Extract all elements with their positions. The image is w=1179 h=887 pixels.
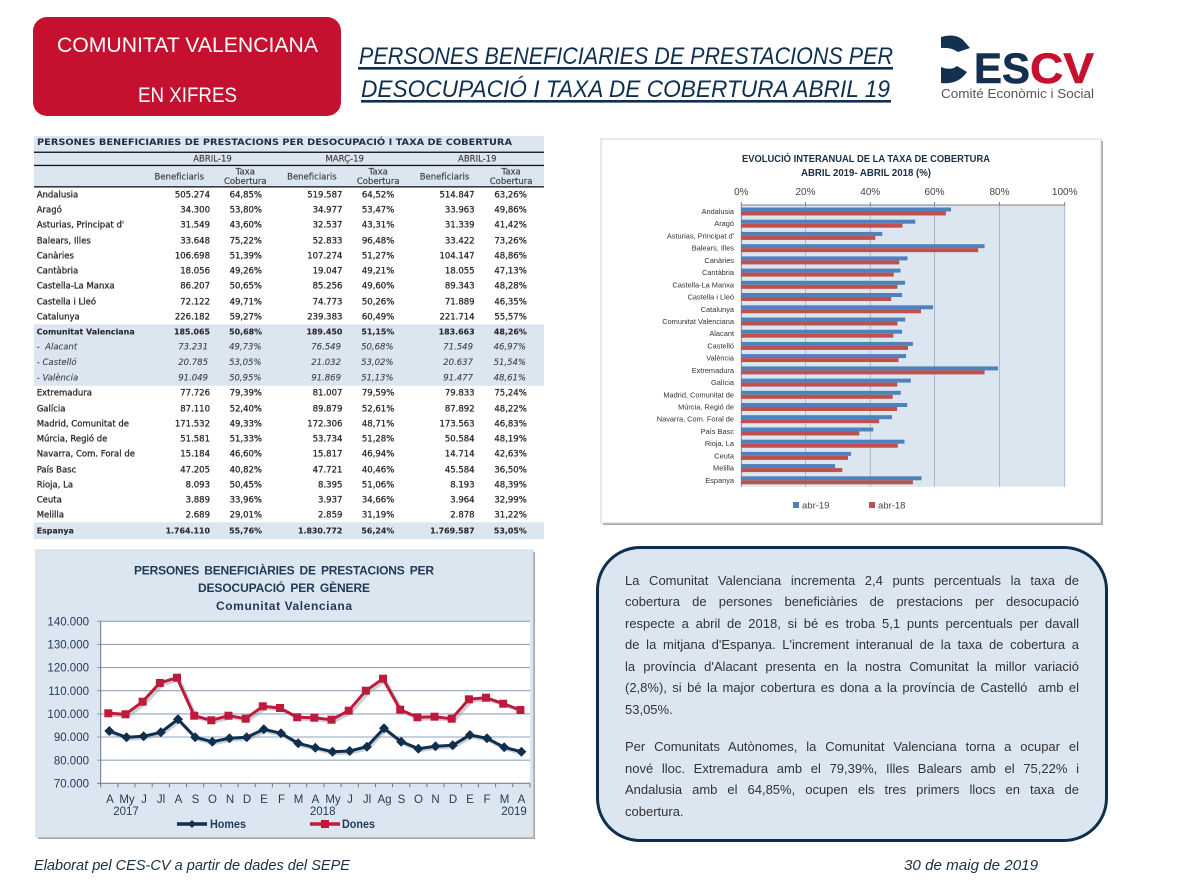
table rows: 31,19% <box>362 511 394 521</box>
table rows: 40,82% <box>230 465 262 475</box>
table rows: 91.477 <box>443 374 474 384</box>
table rows: 55,76% <box>229 526 262 536</box>
table column headers: Beneficiaris <box>155 173 205 183</box>
table rows: 46,83% <box>494 420 527 430</box>
table rows: 226.182 <box>175 312 210 322</box>
line chart month labels: N <box>431 794 440 806</box>
table rows: Castella-La Manxa <box>37 282 115 292</box>
table rows: 43,60% <box>230 221 262 231</box>
line chart y axis labels: 90.000 <box>54 732 89 744</box>
table rows: - Castelló <box>37 357 77 368</box>
table rows: Navarra, Com. Foral de <box>37 450 135 460</box>
table rows: 48,19% <box>494 435 527 445</box>
line chart legend: Homes <box>210 819 246 831</box>
table rows: 14.714 <box>445 450 475 460</box>
table column headers: Taxa <box>500 167 521 177</box>
table rows: 106.698 <box>175 252 210 262</box>
table rows: 86.207 <box>180 282 210 292</box>
panel: commentary text <box>596 546 1108 842</box>
table rows: 173.563 <box>439 420 475 430</box>
line chart month labels: A <box>312 794 320 806</box>
table rows: 21.032 <box>311 358 341 368</box>
logo CES-CV <box>941 36 1094 101</box>
table rows: 104.147 <box>439 252 475 262</box>
table rows: 32,99% <box>494 496 527 506</box>
table rows: 19.047 <box>313 266 342 276</box>
table rows: 64,52% <box>362 190 394 200</box>
table: beneficiaries and coverage rate <box>34 136 544 539</box>
table column headers: Beneficiaris <box>420 173 470 183</box>
table rows: 74.773 <box>313 297 342 307</box>
table rows: 51,15% <box>361 328 394 337</box>
bar chart category labels: Cantàbria <box>702 268 735 277</box>
table rows: 221.714 <box>439 312 475 322</box>
bar chart category labels: Madrid, Comunitat de <box>663 390 734 399</box>
table rows: 32.537 <box>313 221 342 231</box>
paragraph 2: Andalusia amb el 64,85%, ocupen els tres primers llocs en taxa de <box>625 782 1079 797</box>
table rows: 89.343 <box>445 282 475 292</box>
table rows: País Basc <box>37 465 77 475</box>
table rows: 45.584 <box>445 465 475 475</box>
bars abr-18 <box>741 212 985 484</box>
table rows: 48,26% <box>494 328 527 337</box>
bar chart category labels: Andalusia <box>702 207 735 216</box>
source note: Elaborat pel CES-CV a partir de dades del SEPE <box>34 858 350 874</box>
table rows: 47,13% <box>494 266 527 276</box>
bar chart category labels: Balears, Illes <box>692 244 734 253</box>
table rows: 49,73% <box>229 342 262 352</box>
paragraph 1: (2,8%), si bé la major cobertura es dona a la província de Castelló amb el <box>625 680 1079 695</box>
series shadows <box>111 680 523 754</box>
paragraph 1: respecte a abril de 2018, si bé es troba 5,1 punts percentuals per davall <box>625 616 1079 631</box>
table rows <box>37 190 527 536</box>
line chart month labels: Ag <box>377 794 392 806</box>
line chart legend <box>177 819 375 831</box>
table rows: 89.879 <box>313 404 342 414</box>
line chart title <box>134 562 434 613</box>
table rows: 64,85% <box>230 190 262 200</box>
table rows: Cantàbria <box>37 266 78 276</box>
bar chart axis labels: 60% <box>924 187 945 198</box>
line chart month labels: D <box>449 794 457 806</box>
table rows: 46,97% <box>494 342 526 352</box>
table rows: 75,24% <box>494 388 527 398</box>
bar chart category labels: Castella-La Manxa <box>672 280 735 289</box>
table rows: 43,31% <box>362 221 394 231</box>
table rows: 48,22% <box>494 404 527 414</box>
paragraph 2 <box>625 739 1079 818</box>
table rows: 53,47% <box>362 205 394 215</box>
bar chart category labels: Alacant <box>709 329 734 338</box>
table rows: 36,50% <box>494 465 527 475</box>
table column headers: Beneficiaris <box>287 173 337 183</box>
table rows: 49,26% <box>230 266 262 276</box>
table rows: Catalunya <box>37 312 80 322</box>
bar chart plot area <box>741 202 1065 487</box>
table rows: 2.689 <box>186 511 210 521</box>
table column headers: Cobertura <box>490 177 532 187</box>
table rows: 71.889 <box>445 297 475 307</box>
line chart month labels: S <box>398 794 406 806</box>
line chart month labels: 2019 <box>501 806 527 818</box>
table rows: 50.584 <box>445 435 475 445</box>
table rows: 51,28% <box>362 435 394 445</box>
table column headers: Taxa <box>235 167 255 177</box>
table rows: 79,59% <box>362 388 394 398</box>
table rows: 519.587 <box>307 190 342 200</box>
table rows: 48,86% <box>494 252 527 262</box>
table rows: 18.056 <box>180 266 210 276</box>
table column headers <box>155 155 532 187</box>
table rows: 40,46% <box>362 465 394 475</box>
table rows: 33.963 <box>445 205 475 215</box>
bar chart category labels: Múrcia, Regió de <box>678 402 734 412</box>
line chart month labels: 2017 <box>113 806 139 818</box>
bar chart category labels: Comunitat Valenciana <box>662 317 735 326</box>
table rows: 81.007 <box>313 388 342 398</box>
bar chart legend: abr-19 <box>802 500 829 512</box>
line chart y axis labels: 130.000 <box>47 640 89 652</box>
panel: line chart by gender <box>36 550 535 839</box>
table rows: 3.937 <box>318 496 342 506</box>
table rows: 239.383 <box>307 312 342 322</box>
table rows: 53.734 <box>313 435 342 445</box>
table rows: 50,68% <box>229 328 262 337</box>
table rows: 1.764.110 <box>166 526 210 536</box>
line chart month labels: Jl <box>363 794 371 806</box>
line chart title: PERSONES BENEFICIÀRIES DE PRESTACIONS PER <box>134 562 434 578</box>
paragraph 1: 53,05%. <box>625 702 673 717</box>
bar chart title: ABRIL 2019- ABRIL 2018 (%) <box>801 168 931 179</box>
table rows: 51,13% <box>361 374 394 384</box>
line chart month labels: A <box>518 794 526 806</box>
bar chart category labels: Melilla <box>713 464 735 473</box>
table rows: 48,71% <box>362 420 394 430</box>
table rows: 185.065 <box>174 328 210 337</box>
line chart month labels: A <box>175 794 183 806</box>
line chart y axis labels: 80.000 <box>54 755 89 767</box>
bar chart title: EVOLUCIÓ INTERANUAL DE LA TAXA DE COBERTURA <box>742 152 990 165</box>
series: Dones <box>104 674 524 724</box>
table rows: 76.549 <box>311 342 341 352</box>
table rows: 514.847 <box>439 190 475 200</box>
table rows: 63,26% <box>494 190 527 200</box>
table rows: 189.450 <box>306 328 343 337</box>
table rows: 46,60% <box>230 450 262 460</box>
line chart month labels: M <box>294 794 303 806</box>
table rows: 56,24% <box>361 526 394 536</box>
table rows: Aragó <box>37 204 62 215</box>
table rows: Extremadura <box>37 388 92 398</box>
table rows: Espanya <box>37 526 74 536</box>
table column headers: ABRIL-19 <box>193 155 232 165</box>
bar chart category labels: Castella i Lleó <box>688 292 734 302</box>
table rows: 87.110 <box>180 404 210 414</box>
bar chart category labels: Extremadura <box>692 366 735 375</box>
bar chart category labels: Catalunya <box>701 305 735 314</box>
line chart y axis labels: 70.000 <box>54 778 89 790</box>
table rows: 73.231 <box>178 342 208 352</box>
table rows: 51,27% <box>362 252 394 262</box>
table rows: 60,49% <box>362 312 394 322</box>
bar chart category labels: Aragó <box>714 219 734 228</box>
table rows: 29,01% <box>230 511 262 521</box>
table column headers: Taxa <box>368 167 388 177</box>
bar chart category labels: València <box>706 354 735 363</box>
table rows: 53,80% <box>230 205 262 215</box>
table rows: 34.300 <box>180 205 210 215</box>
table rows: - València <box>37 373 78 384</box>
table rows: 15.184 <box>180 450 210 460</box>
bar chart category labels: Rioja, La <box>705 439 735 448</box>
table rows: 55,57% <box>494 312 527 322</box>
table rows: 34.977 <box>313 205 342 215</box>
table rows: 31.549 <box>180 221 210 231</box>
table rows: Balears, Illes <box>37 237 91 247</box>
logo CES-CV: CV <box>1030 45 1094 93</box>
table rows: 51,39% <box>230 252 262 262</box>
table rows: 72.122 <box>180 297 210 307</box>
table rows: 50,45% <box>230 481 262 491</box>
table rows: 33.422 <box>445 237 475 247</box>
line chart month labels: S <box>192 794 200 806</box>
line chart month labels: My <box>325 794 341 806</box>
paragraph 2: Per Comunitats Autònomes, la Comunitat Valenciana torna a ocupar el <box>625 739 1079 754</box>
table rows: 51,06% <box>362 481 394 491</box>
table rows: 53,05% <box>229 358 262 368</box>
paragraph 2: cobertura. <box>625 804 684 818</box>
table rows: 50,65% <box>230 282 262 292</box>
table rows: 73,26% <box>494 237 527 247</box>
table rows: 49,33% <box>230 420 262 430</box>
table rows: 49,86% <box>494 205 527 215</box>
table rows: 49,21% <box>362 266 394 276</box>
table rows: 1.830.772 <box>298 526 342 536</box>
table rows: Melilla <box>37 511 64 521</box>
table column headers: Cobertura <box>357 177 400 187</box>
table rows: 52.833 <box>313 237 342 247</box>
table rows: 87.892 <box>445 404 475 414</box>
bar chart axis labels: 40% <box>860 187 880 198</box>
bar chart legend: abr-18 <box>878 500 905 512</box>
line chart y axis labels: 110.000 <box>48 686 89 698</box>
line chart month labels <box>106 794 527 818</box>
table column headers: Cobertura <box>224 177 267 187</box>
table rows: Comunitat Valenciana <box>37 328 135 337</box>
line chart month labels: O <box>208 794 217 806</box>
line chart month labels: M <box>500 794 509 806</box>
bar chart axis labels: 100% <box>1052 187 1078 198</box>
table rows: Múrcia, Regió de <box>37 434 107 445</box>
table rows: 31,22% <box>494 511 527 521</box>
line chart month labels: J <box>141 794 147 806</box>
table rows: 33.648 <box>180 237 210 247</box>
table rows: 50,95% <box>229 374 262 384</box>
table rows: 50,68% <box>361 342 394 352</box>
line chart plot area <box>97 621 530 787</box>
main title: DESOCUPACIÓ I TAXA DE COBERTURA ABRIL 19 <box>361 76 890 103</box>
header badge: Comunitat Valenciana en xifres: COMUNITAT VALENCIANA <box>57 34 318 57</box>
table rows: 505.274 <box>175 190 210 200</box>
table rows: Madrid, Comunitat de <box>37 420 129 430</box>
line chart month labels: J <box>347 794 353 806</box>
table rows: 107.274 <box>307 252 342 262</box>
bar chart legend <box>793 500 905 512</box>
table rows: 3.964 <box>450 496 475 506</box>
table title: PERSONES BENEFICIARIES DE PRESTACIONS PER DESOCUPACIÓ I TAXA DE COBERTURA <box>37 136 512 148</box>
table rows: 52,40% <box>230 404 262 414</box>
table rows: 34,66% <box>362 496 394 506</box>
table rows: 31.339 <box>445 221 475 231</box>
table rows: 2.859 <box>318 511 342 521</box>
table rows: 71.549 <box>443 342 473 352</box>
line chart month labels: D <box>243 794 251 806</box>
line chart month labels: Jl <box>157 794 165 806</box>
paragraph 1: cobertura de persones beneficiàries de prestacions per desocupació <box>625 594 1079 609</box>
table rows: 2.878 <box>450 511 475 521</box>
table column headers: MARÇ-19 <box>325 155 364 165</box>
paragraph 1: la província d'Alacant presenta en la nostra Comunitat la millor variació <box>625 659 1079 674</box>
table rows: 52,61% <box>362 404 394 414</box>
table rows: 49,71% <box>230 297 262 307</box>
bar chart title <box>742 152 990 179</box>
table rows: 50,26% <box>362 297 394 307</box>
line chart month labels: My <box>119 794 135 806</box>
table rows: 75,22% <box>230 237 262 247</box>
table rows: Ceuta <box>37 496 62 506</box>
bar chart axis labels: 0% <box>734 187 749 198</box>
header badge: Comunitat Valenciana en xifres: EN XIFRES <box>138 84 237 107</box>
bar chart category labels: Castelló <box>707 341 734 350</box>
table rows: 8.193 <box>450 481 475 491</box>
table rows: 77.726 <box>180 388 210 398</box>
main title <box>358 43 893 103</box>
line chart y axis labels <box>47 616 89 790</box>
table rows: 48,28% <box>494 282 527 292</box>
line chart month labels: 2018 <box>310 806 335 818</box>
table rows: 96,48% <box>362 237 394 247</box>
table rows: 172.306 <box>307 420 342 430</box>
paragraph 1: de la mitjana d'Espanya. L'increment interanual de la taxa de cobertura a <box>625 637 1079 652</box>
table rows: Galícia <box>37 404 65 414</box>
table rows: 33,96% <box>230 496 262 506</box>
table rows: 53,02% <box>361 358 394 368</box>
line chart month labels: F <box>483 794 491 806</box>
table rows: 51,33% <box>230 435 262 445</box>
line chart legend: Dones <box>342 819 375 831</box>
line chart month labels: A <box>106 794 114 806</box>
table rows: 79,39% <box>230 388 262 398</box>
panel: coverage rate bar chart <box>601 139 1103 525</box>
table rows: 51,54% <box>494 358 526 368</box>
table rows: 48,61% <box>494 374 526 384</box>
paragraph 1: La Comunitat Valenciana incrementa 2,4 punts percentuals la taxa de <box>625 573 1079 588</box>
bar chart category labels: Espanya <box>705 476 735 485</box>
table rows: 46,94% <box>362 450 394 460</box>
logo CES-CV: ES <box>974 45 1030 93</box>
table rows: 8.093 <box>186 481 210 491</box>
table rows: 8.395 <box>318 481 342 491</box>
table rows: 48,39% <box>494 481 527 491</box>
table rows: 53,05% <box>494 526 527 536</box>
bar chart category labels: Canàries <box>704 256 734 265</box>
line chart y axis labels: 120.000 <box>47 663 89 675</box>
line chart y axis labels: 140.000 <box>47 616 89 628</box>
date: 30 de maig de 2019 <box>904 858 1038 874</box>
table rows: Asturias, Principat d' <box>37 221 124 231</box>
table rows: 171.532 <box>175 420 210 430</box>
table rows: 47.205 <box>180 465 210 475</box>
table rows: 59,27% <box>230 312 262 322</box>
table rows: 41,42% <box>494 221 527 231</box>
line chart title: Comunitat Valenciana <box>216 599 352 613</box>
table rows: Canàries <box>37 252 75 262</box>
table rows: Andalusia <box>37 190 78 200</box>
bar chart category labels: País Basc <box>701 427 734 436</box>
table rows: Rioja, La <box>37 481 73 491</box>
table rows: 85.256 <box>313 282 342 292</box>
bar chart category labels: Galícia <box>711 378 735 387</box>
bar chart axis labels <box>734 187 1078 198</box>
table rows: 18.055 <box>445 266 475 276</box>
table column headers: ABRIL-19 <box>458 155 497 165</box>
table rows: 79.833 <box>445 388 475 398</box>
table rows: 42,63% <box>494 450 527 460</box>
logo CES-CV: Comité Econòmic i Social <box>941 87 1094 101</box>
table rows: 20.785 <box>178 358 208 368</box>
table rows: 46,35% <box>494 297 527 307</box>
line chart title: DESOCUPACIÓ PER GÈNERE <box>198 580 370 595</box>
bar chart category labels: Asturias, Principat d' <box>667 231 735 240</box>
header badge: Comunitat Valenciana en xifres <box>33 17 341 116</box>
bar chart category labels: Navarra, Com. Foral de <box>657 415 734 424</box>
paragraph 2: nové lloc. Extremadura amb el 79,39%, Illes Balears amb el 75,22% i <box>625 760 1079 776</box>
table rows: 91.869 <box>311 374 341 384</box>
table rows: 51.581 <box>180 435 210 445</box>
bar chart axis labels: 20% <box>795 187 816 198</box>
main title: PERSONES BENEFICIARIES DE PRESTACIONS PER <box>359 43 893 70</box>
series: Homes <box>104 714 526 757</box>
bars abr-19 <box>741 208 998 480</box>
line chart y axis labels: 100.000 <box>47 709 89 721</box>
table rows: 20.637 <box>443 358 474 368</box>
line chart month labels: E <box>466 794 474 806</box>
table rows: 91.049 <box>178 374 208 384</box>
line chart month labels: F <box>278 794 285 806</box>
table rows: 49,60% <box>362 282 394 292</box>
table rows: 3.889 <box>186 496 210 506</box>
bar chart category labels <box>657 207 735 485</box>
table rows: 183.663 <box>439 328 475 337</box>
table rows: 1.769.587 <box>430 526 475 536</box>
line chart month labels: N <box>226 794 234 806</box>
table rows: Castella i Lleó <box>37 296 96 307</box>
line chart month labels: E <box>260 794 268 806</box>
bar chart axis labels: 80% <box>989 187 1010 198</box>
paragraph 1 <box>625 573 1079 717</box>
line chart month labels: O <box>414 794 423 806</box>
table rows: 15.817 <box>313 450 342 460</box>
table rows: 47.721 <box>313 465 342 475</box>
table rows: - Alacant <box>37 342 78 352</box>
bar chart category labels: Ceuta <box>714 451 735 460</box>
